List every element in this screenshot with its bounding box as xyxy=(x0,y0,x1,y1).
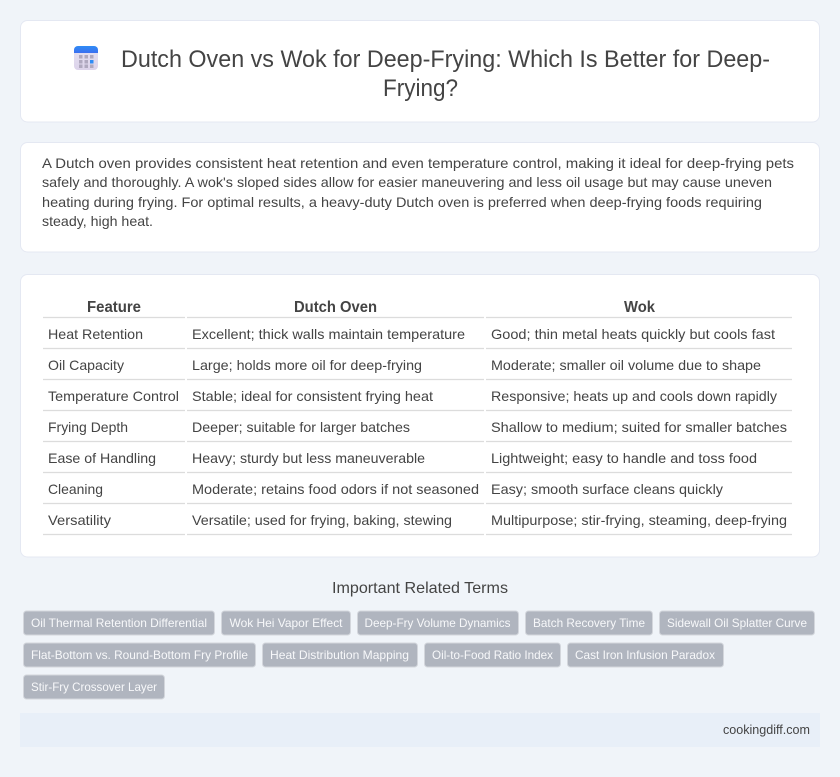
row: frying depth xyxy=(48,419,787,435)
tag xyxy=(24,675,164,699)
row: frying depth: Shallow to medium; suited for smaller batches xyxy=(491,419,787,435)
tag xyxy=(424,643,560,667)
row: cleaning: Cleaning xyxy=(48,481,103,497)
row: temperature control: Stable; ideal for consistent frying heat xyxy=(192,388,433,404)
tag: Heat Distribution Mapping xyxy=(270,648,409,662)
tag xyxy=(24,611,214,635)
row: versatility xyxy=(48,512,787,528)
table rows xyxy=(43,318,792,534)
row: oil capacity: Large; holds more oil for deep-frying xyxy=(192,357,422,373)
tag xyxy=(568,643,724,667)
tag xyxy=(24,643,256,667)
row: versatility: Multipurpose; stir-frying, steaming, deep-frying xyxy=(491,512,787,528)
row: heat retention: Excellent; thick walls maintain temperature xyxy=(192,326,465,342)
row: ease of handling: Ease of Handling xyxy=(48,450,156,466)
row: cleaning: Moderate; retains food odors if not seasoned xyxy=(192,481,479,497)
title: Frying? xyxy=(383,75,458,102)
tag: Deep-Fry Volume Dynamics xyxy=(364,616,510,630)
tag: Oil Thermal Retention Differential xyxy=(31,616,207,630)
panel: header xyxy=(20,20,820,122)
row: oil capacity: Moderate; smaller oil volume due to shape xyxy=(491,357,761,373)
tag xyxy=(222,611,350,635)
table header: Wok xyxy=(624,299,655,316)
row: oil capacity: Oil Capacity xyxy=(48,357,124,373)
heading: important related terms: Important Related Terms xyxy=(332,580,508,597)
related term tags xyxy=(24,611,814,699)
icon: calendar xyxy=(74,46,98,70)
summary text: heating during frying. For optimal results, a heavy-duty Dutch oven is preferred when deep-frying foods requiring xyxy=(42,194,762,210)
tag: Cast Iron Infusion Paradox xyxy=(575,648,715,662)
row: cleaning xyxy=(48,481,723,497)
row: heat retention: Heat Retention xyxy=(48,326,143,342)
panel: summary paragraph xyxy=(20,142,820,252)
summary text: safely and thoroughly. A wok's sloped sides allow for easier maneuvering and less oil usage but may cause uneven xyxy=(42,174,772,190)
row: versatility: Versatility xyxy=(48,512,111,528)
row: heat retention: Good; thin metal heats quickly but cools fast xyxy=(491,326,775,342)
row: temperature control xyxy=(48,388,777,404)
footer bar xyxy=(20,713,820,747)
tag xyxy=(358,611,518,635)
tag: Wok Hei Vapor Effect xyxy=(230,616,343,630)
row: temperature control: Responsive; heats up and cools down rapidly xyxy=(491,388,777,404)
tag: Flat-Bottom vs. Round-Bottom Fry Profile xyxy=(31,648,248,662)
tag: Oil-to-Food Ratio Index xyxy=(432,648,553,662)
table header: Feature xyxy=(87,299,141,316)
row: ease of handling xyxy=(48,450,757,466)
table header xyxy=(87,299,655,316)
row: ease of handling: Lightweight; easy to handle and toss food xyxy=(491,450,757,466)
tag xyxy=(262,643,418,667)
row: temperature control: Temperature Control xyxy=(48,388,179,404)
row: ease of handling: Heavy; sturdy but less maneuverable xyxy=(192,450,425,466)
tag: Stir-Fry Crossover Layer xyxy=(31,680,157,694)
title: Dutch Oven vs Wok for Deep-Frying: Which Is Better for Deep- xyxy=(121,46,770,73)
panel: comparison table xyxy=(20,274,820,557)
summary text: A Dutch oven provides consistent heat retention and even temperature control, making it ideal for deep-frying pets xyxy=(42,155,794,171)
summary text xyxy=(42,155,794,229)
row: frying depth: Frying Depth xyxy=(48,419,128,435)
tag: Sidewall Oil Splatter Curve xyxy=(667,616,807,630)
tag xyxy=(660,611,814,635)
row: cleaning: Easy; smooth surface cleans quickly xyxy=(491,481,723,497)
row: oil capacity xyxy=(48,357,761,373)
row: heat retention xyxy=(48,326,775,342)
summary text: steady, high heat. xyxy=(42,213,153,229)
row: versatility: Versatile; used for frying, baking, stewing xyxy=(192,512,452,528)
title xyxy=(121,46,770,102)
row: frying depth: Deeper; suitable for larger batches xyxy=(192,419,410,435)
tag xyxy=(526,611,652,635)
table header: Dutch Oven xyxy=(294,299,377,316)
footer source: cookingdiff.com xyxy=(723,723,810,737)
tag: Batch Recovery Time xyxy=(533,616,645,630)
